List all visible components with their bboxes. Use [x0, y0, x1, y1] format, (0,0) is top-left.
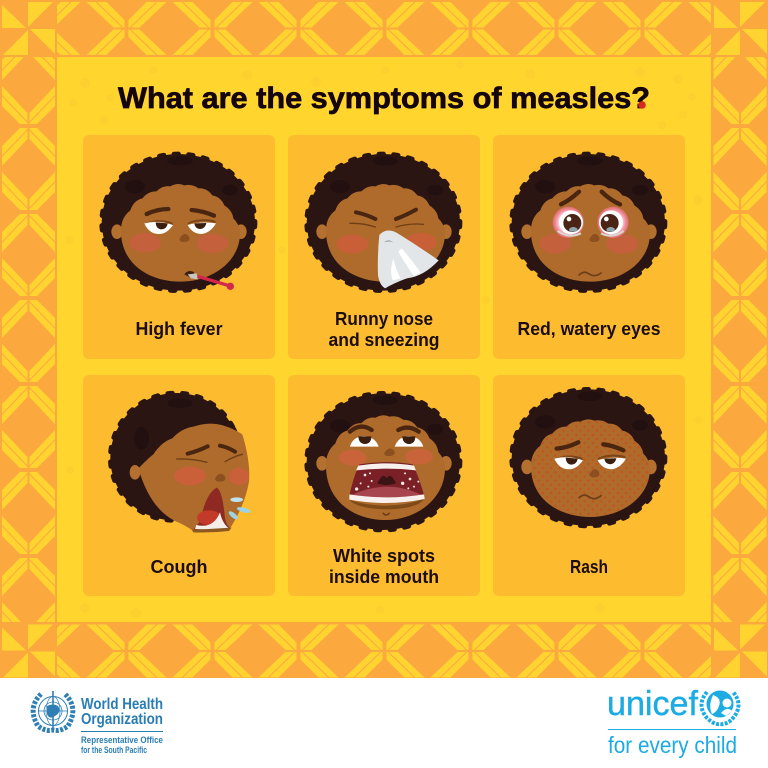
left border pattern [2, 42, 55, 640]
panel: red, watery eyes [493, 135, 685, 359]
title: What are the symptoms of measles? [118, 82, 650, 115]
card background [83, 375, 275, 596]
panel: high fever [83, 135, 275, 359]
WHO office text: Representative Office [81, 735, 163, 746]
card background [493, 375, 685, 596]
UNICEF wordmark: unicef [607, 685, 699, 723]
face illustration: red watery eyes [512, 154, 665, 291]
label: Cough [150, 557, 208, 577]
corner pinwheel: top left [2, 2, 55, 55]
card background [288, 135, 480, 359]
label: Runny nose [335, 309, 433, 329]
label [328, 309, 440, 350]
label: inside mouth [329, 567, 439, 587]
face illustration: sneezing into a tissue [307, 154, 460, 291]
corner pinwheel: top right [714, 2, 767, 55]
corner pinwheel: bottom left [2, 624, 55, 678]
face illustration: rash [512, 389, 665, 526]
label [329, 546, 439, 587]
label: White spots [333, 546, 435, 566]
card background [83, 135, 275, 359]
face illustration: fever with thermometer [102, 154, 255, 291]
label: Rash [570, 557, 608, 577]
corner pinwheel: bottom right [714, 624, 767, 678]
right border pattern [714, 42, 766, 640]
white footer [0, 678, 768, 768]
WHO logo [33, 691, 163, 756]
WHO logo: Organization [81, 711, 163, 728]
panel: rash [493, 375, 685, 596]
UNICEF tagline: for every child [608, 732, 737, 758]
bottom border pattern [42, 624, 726, 678]
icon: UNICEF emblem [702, 690, 738, 724]
face illustration: open mouth with white spots [307, 393, 460, 530]
panel: runny nose and sneezing [288, 135, 480, 359]
yellow main panel [57, 57, 711, 622]
icon: WHO emblem [33, 691, 73, 730]
label: Red, watery eyes [518, 319, 660, 339]
WHO logo: for the South Pacific [81, 745, 147, 756]
face illustration: coughing in profile [89, 372, 261, 542]
card background [493, 135, 685, 359]
panel: white spots inside mouth [288, 375, 480, 596]
label: and sneezing [328, 330, 440, 350]
card background [288, 375, 480, 596]
UNICEF logo [607, 685, 738, 758]
top border pattern [42, 2, 726, 55]
WHO name: World Health [81, 696, 163, 713]
panel: cough [83, 372, 275, 596]
label: High fever [136, 319, 222, 339]
